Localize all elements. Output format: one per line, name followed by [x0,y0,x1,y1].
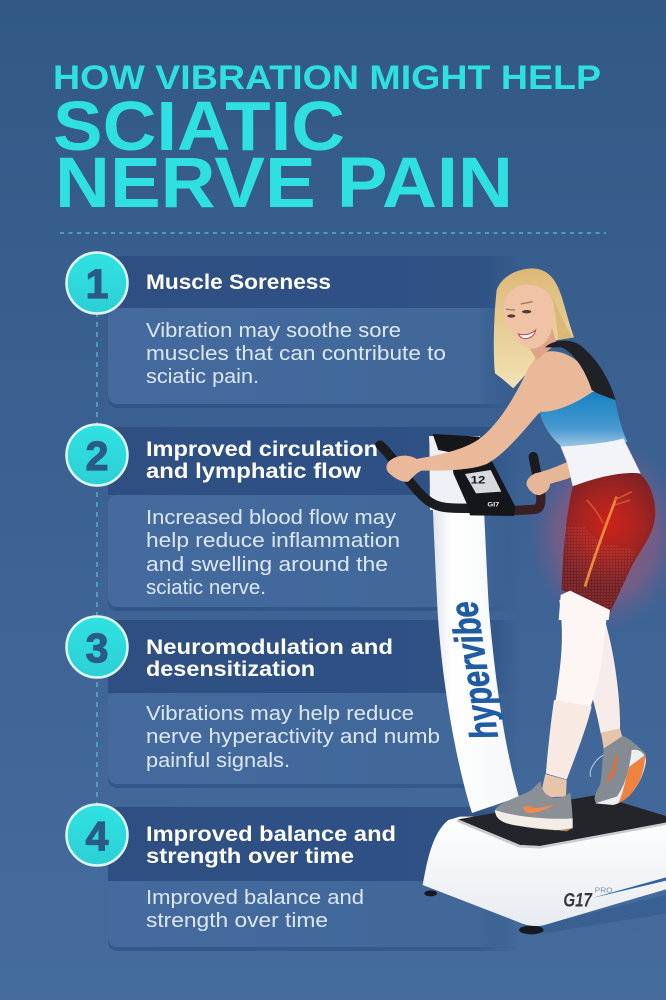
panel: improved circulation [108,427,520,611]
torso skin [517,351,597,413]
heading [146,437,378,483]
panel: balance and strength [108,807,520,951]
heading [146,822,396,868]
console [433,434,515,516]
blue stripe [594,877,666,897]
console column neck [429,437,468,510]
tank top [540,392,627,460]
number badge 4: 4 [86,813,109,859]
body text [146,506,400,599]
front shoe [495,782,573,831]
number badge 4 [66,804,128,866]
body text: sciatic nerve. [146,576,266,599]
panel: muscle soreness [108,256,520,408]
vibration platform base [423,795,666,934]
console: 12 [471,474,485,486]
back leg [587,600,620,733]
panel: neuromodulation [108,620,520,788]
body text: muscles that can contribute to [146,342,446,365]
body text: Increased blood flow may [146,506,397,529]
front leg [546,600,609,779]
nerve highlight [585,497,617,587]
number badge 1 [66,252,128,314]
hair [494,268,574,388]
body text [146,702,440,772]
face [504,285,554,349]
number badge 3 [66,616,128,678]
front ankle [540,774,567,797]
heading: and lymphatic flow [146,459,361,483]
heading: desensitization [146,657,315,681]
model label: PRO [595,886,613,895]
heading: Improved circulation [146,437,378,461]
body text: help reduce inflammation [146,529,400,552]
title line: nerve pain: NERVE PAIN [55,144,513,223]
brand name: hypervibe [443,598,507,742]
black top straps [545,341,616,400]
rubber feet [424,890,544,934]
body text: painful signals. [146,749,290,772]
number badge 3: 3 [86,625,108,671]
heading [146,635,393,681]
machine column [429,436,519,813]
body text: Vibrations may help reduce [146,702,414,725]
body text [146,319,446,388]
body text: nerve hyperactivity and numb [146,725,440,748]
number badge 2: 2 [86,433,108,479]
waistband [561,438,641,486]
heading: Muscle Soreness [146,270,331,294]
dotted texture [563,527,637,610]
back shoe [590,736,646,805]
woman upper body and console [380,268,655,620]
heading: strength over time [146,844,354,868]
far arm [527,461,572,495]
model label [563,886,613,912]
woman lower body [495,600,646,831]
body text: sciatic pain. [146,365,259,388]
far handle [513,457,541,511]
hair side lock [552,293,573,340]
title line: sciatic: SCIATIC [53,87,345,165]
purple glow around hip [528,439,666,631]
console: GI7 [487,503,500,509]
body text: Improved balance and [146,886,364,909]
near handlebar [380,445,470,508]
neck [527,327,557,360]
red shorts [562,473,655,613]
number badge 1: 1 [86,261,108,307]
body text [146,886,364,932]
number badge 2 [66,424,128,486]
model label: G17 [563,891,593,912]
body text: Vibration may soothe sore [146,319,401,342]
front leg top [559,591,610,620]
heading: Improved balance and [146,822,396,846]
body text: and swelling around the [146,553,388,576]
body text: strength over time [146,909,328,932]
heading: Neuromodulation and [146,635,393,659]
title [53,59,601,223]
near arm and hand [386,359,557,482]
eyes and smile [506,302,536,339]
back ankle [601,728,623,751]
title line: how vibration might help: HOW VIBRATION MIGHT HELP [53,59,601,97]
